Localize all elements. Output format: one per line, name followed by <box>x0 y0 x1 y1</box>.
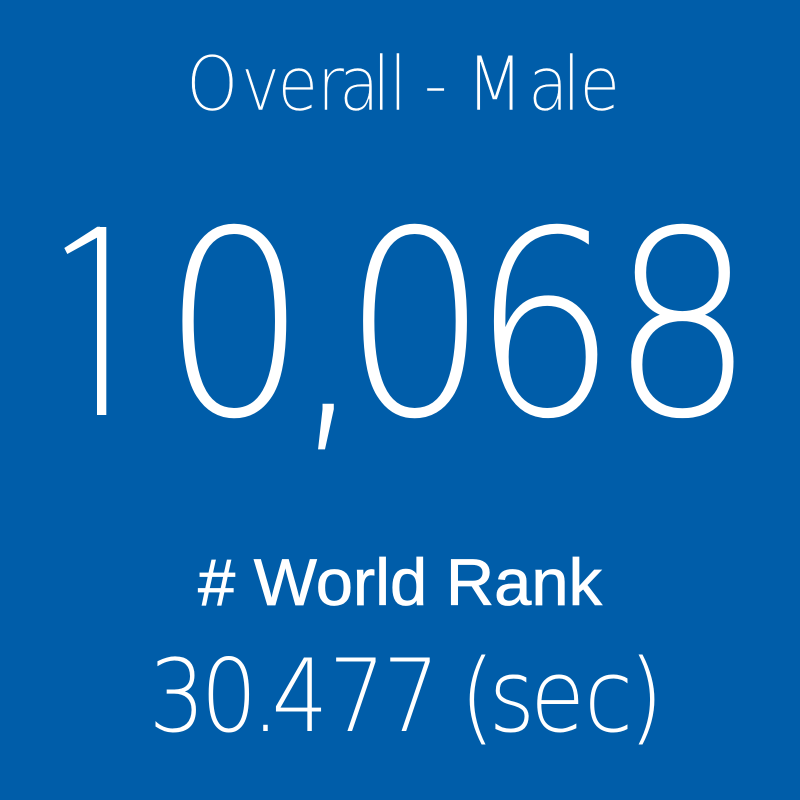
title: Overall - Male <box>186 40 620 128</box>
label: world rank: # World Rank <box>198 545 603 619</box>
main number: 10,068 <box>25 177 755 481</box>
time value: 30.477 (sec) <box>149 639 664 755</box>
